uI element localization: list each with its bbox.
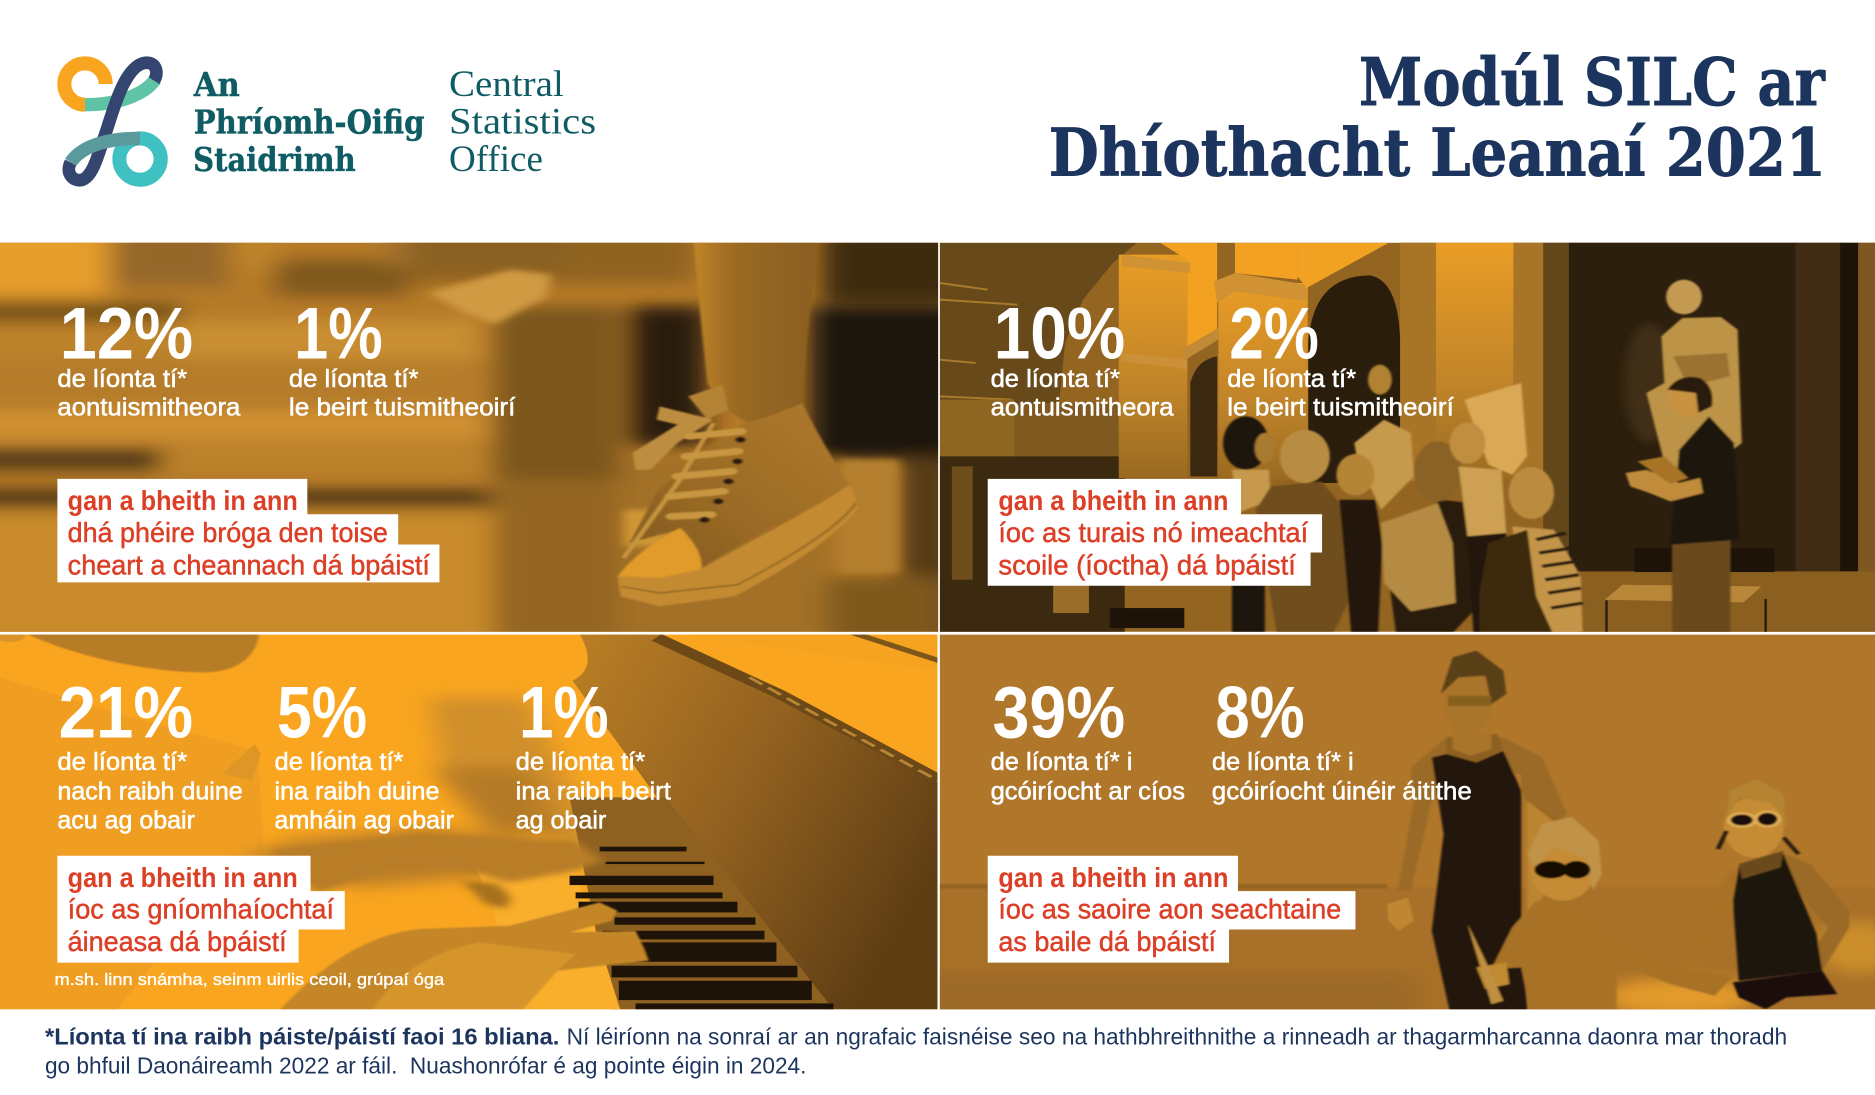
header — [64, 43, 1826, 192]
stat: 1%: 1% — [294, 293, 383, 374]
callout: holiday: as baile dá bpáistí — [998, 926, 1216, 957]
footnote: *Líonta tí ina raibh páiste/páistí faoi 16 bliana. — [45, 1024, 559, 1050]
logo text: Irish — [193, 66, 425, 179]
logo text: English: Central — [449, 64, 564, 105]
label: lone parent: aontuismitheora — [57, 395, 241, 422]
callout: leisure activities: áineasa dá bpáistí — [68, 926, 287, 957]
label: owner occupied: de líonta tí* i — [1212, 749, 1354, 776]
stat: 2%: 2% — [1229, 293, 1319, 374]
callout: leisure activities: gan a bheith in ann — [68, 862, 298, 893]
callout: leisure activities — [57, 856, 345, 963]
panel: leisure activities — [0, 631, 953, 1031]
logo text: Irish: Staidrimh — [193, 141, 356, 179]
callout: shoes: cheart a cheannach dá bpáistí — [68, 550, 430, 581]
label: owner occupied: gcóiríocht úinéir áitithe — [1212, 778, 1472, 805]
label: two parents — [289, 366, 516, 422]
callout: holiday — [988, 856, 1355, 963]
callout: shoes — [57, 479, 439, 582]
stat: 21%: 21% — [59, 672, 193, 753]
stat: 8%: 8% — [1215, 672, 1305, 753]
kids — [1232, 470, 1271, 513]
label: two people working: de líonta tí* — [516, 749, 646, 776]
label: one person working: amháin ag obair — [275, 807, 454, 834]
photo: family on beach — [916, 631, 1875, 1031]
footnote: go bhfuil Daonáireamh 2022 ar fáil. Nuashonrófar é ag pointe éigin in 2024. — [45, 1052, 806, 1078]
adult — [1398, 737, 1567, 891]
callout: school trips: scoile (íoctha) dá bpáistí — [998, 550, 1296, 581]
label: rented: gcóiríocht ar cíos — [991, 778, 1185, 805]
label: nobody working — [57, 749, 243, 834]
label: two people working — [516, 749, 671, 834]
label: owner occupied — [1212, 749, 1472, 805]
logo text: English: Office — [449, 139, 543, 180]
teacher — [1672, 540, 1730, 633]
callout: holiday: gan a bheith in ann — [998, 862, 1228, 893]
label: two parents: de líonta tí* — [289, 366, 419, 393]
stat: 5%: 5% — [277, 672, 367, 753]
label: two people working: ag obair — [516, 807, 606, 834]
photo: museum visit — [934, 240, 1875, 640]
logo text: Irish: Phríomh-Oifig — [194, 103, 425, 141]
stat: 12%: 12% — [60, 293, 193, 374]
logo mark — [64, 63, 161, 180]
callout: leisure activities: íoc as gníomhaíochtaí — [68, 893, 334, 924]
footnote — [45, 1024, 1787, 1078]
label: two parents: de líonta tí* — [1227, 366, 1357, 393]
logo text: English — [449, 64, 596, 180]
label: two parents — [1227, 366, 1454, 422]
label: rented: de líonta tí* i — [991, 749, 1132, 776]
callout: holiday: íoc as saoire aon seachtaine — [998, 893, 1341, 924]
label: nobody working: de líonta tí* — [57, 749, 188, 776]
label: rented — [991, 749, 1185, 805]
callout: school trips — [988, 479, 1322, 586]
label: two parents: le beirt tuismitheoirí — [289, 395, 516, 422]
callout: shoes: gan a bheith in ann — [68, 485, 298, 516]
label: lone parent: de líonta tí* — [57, 366, 188, 393]
panel: shoes — [0, 242, 938, 632]
footnote: Ní léiríonn na sonraí ar an ngrafaic faisnéise seo na hathbhreithnithe a rinneadh ar thagarmharcanna daonra mar thoradh — [567, 1024, 1787, 1050]
stat: 1%: 1% — [519, 672, 609, 753]
photo: piano — [0, 631, 953, 1031]
label: lone parent — [57, 366, 241, 422]
label: one person working: de líonta tí* — [275, 749, 404, 776]
right child — [1732, 869, 1740, 910]
panel: holiday — [916, 631, 1875, 1031]
logo text: Irish: An — [193, 66, 240, 104]
photo: child's shoe — [0, 242, 938, 632]
label: lone parent: de líonta tí* — [991, 366, 1120, 393]
label: two people working: ina raibh beirt — [516, 778, 671, 805]
label: nobody working: nach raibh duine — [57, 778, 243, 805]
label: one person working — [275, 749, 454, 834]
logo text: English: Statistics — [449, 101, 596, 142]
label: lone parent — [991, 366, 1174, 422]
callout: school trips: íoc as turais nó imeachtaí — [998, 517, 1309, 548]
callout: shoes: dhá phéire bróga den toise — [68, 517, 388, 548]
stat: 39%: 39% — [993, 672, 1125, 753]
label: one person working: ina raibh duine — [275, 778, 439, 805]
note: examples: m.sh. linn snámha, seinm uirlis ceoil, grúpaí óga — [55, 970, 445, 989]
stat: 10%: 10% — [994, 293, 1125, 374]
callout: school trips: gan a bheith in ann — [998, 485, 1228, 516]
left child — [1491, 901, 1733, 1011]
label: two parents: le beirt tuismitheoirí — [1227, 395, 1454, 422]
label: lone parent: aontuismitheora — [991, 395, 1174, 422]
panel: school trips — [934, 240, 1875, 640]
statues — [1666, 280, 1702, 314]
label: nobody working: acu ag obair — [57, 807, 195, 834]
title — [1049, 43, 1826, 192]
